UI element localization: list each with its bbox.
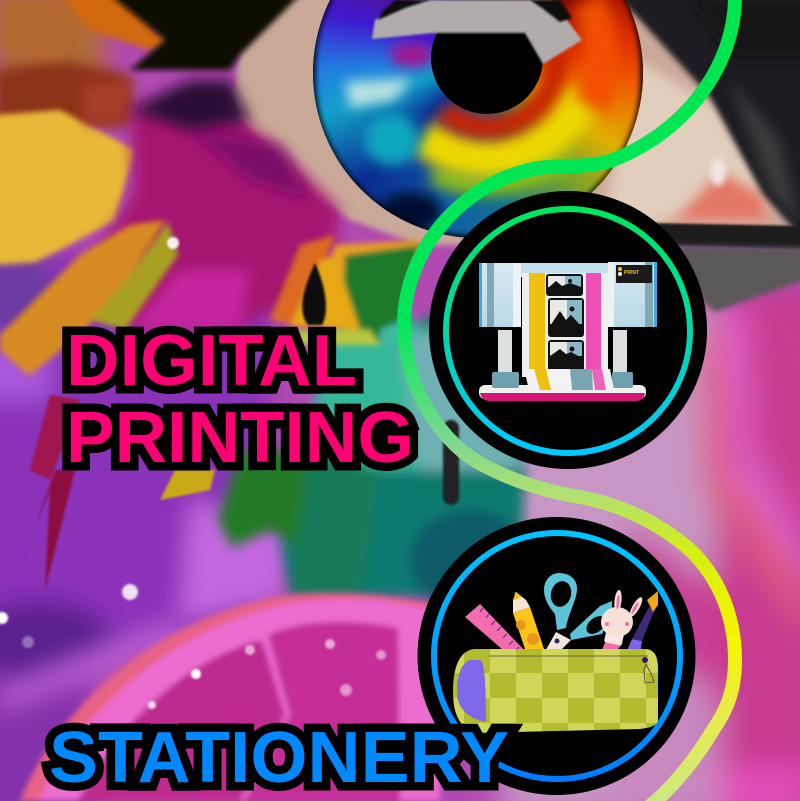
badge: stationery [418, 517, 696, 795]
green-to-yellow swoosh [404, 0, 735, 801]
orange and olive feather strip [0, 220, 178, 375]
icon: pencil case [453, 573, 658, 733]
dark lashes and lid at right [600, 0, 800, 312]
zip pull [642, 657, 654, 683]
magenta near pupil [390, 43, 434, 67]
pink right backdrop [500, 290, 800, 801]
iris [312, 0, 644, 239]
rainbow feathers under the eye [290, 240, 420, 345]
inner corner of the eye [660, 172, 768, 222]
right foot [612, 372, 633, 388]
paper output [524, 369, 614, 390]
right body [608, 262, 657, 327]
purple lower-left backdrop [0, 255, 300, 801]
dark blue shadow [378, 192, 442, 232]
base [479, 385, 646, 399]
left foot [492, 372, 519, 388]
top bar [510, 263, 620, 277]
heading: digital printing: DIGITAL [66, 321, 357, 401]
ring [446, 209, 690, 453]
yellow stripe [529, 273, 545, 379]
scissors [543, 573, 612, 655]
paper [522, 273, 608, 377]
white sparkles [0, 237, 386, 780]
grapefruit slice [20, 593, 440, 801]
zip line [489, 655, 648, 657]
pupil [431, 2, 543, 114]
control panel: PRINT [624, 270, 639, 276]
heading: stationery: STATIONERY [49, 718, 509, 798]
red ring [443, 46, 556, 127]
control panel [616, 265, 652, 283]
yellow band [423, 92, 581, 158]
dark red feathers [22, 395, 80, 590]
bunny topper [600, 590, 645, 655]
orange gold paint at top-left [0, 0, 135, 265]
orange strip [270, 235, 335, 325]
printed picture 3 [548, 340, 584, 379]
lash shadow on highlight [378, 0, 572, 22]
teal and green face [218, 290, 530, 610]
case opening [457, 660, 486, 722]
left body [479, 263, 521, 327]
heading: digital printing [66, 321, 414, 478]
pencil [513, 592, 546, 655]
lighter skin right of the iris [600, 60, 770, 225]
ruler [465, 604, 527, 656]
right leg [613, 330, 627, 374]
orange band [587, 1, 602, 107]
outer yellow-green band [433, 156, 569, 186]
dark rim [312, 0, 644, 239]
eyelashes at top [0, 0, 300, 70]
lower feather tip [160, 470, 215, 500]
printed picture 2 [548, 298, 584, 337]
ring [434, 533, 680, 779]
second line: PRINTING [66, 398, 414, 478]
magenta feathers [90, 80, 340, 330]
left leg [498, 330, 512, 374]
badge: digital printing [429, 191, 707, 469]
paintbrush [625, 591, 658, 655]
printed picture 1 [546, 274, 583, 296]
pale cyan glow [345, 78, 412, 108]
skin around the eye [232, 0, 800, 245]
black drips [302, 263, 459, 505]
magenta stripe [586, 273, 601, 379]
eye highlight [372, 0, 582, 64]
icon: wide-format printer [479, 262, 657, 401]
case body [453, 649, 658, 733]
teal patch [364, 114, 420, 166]
